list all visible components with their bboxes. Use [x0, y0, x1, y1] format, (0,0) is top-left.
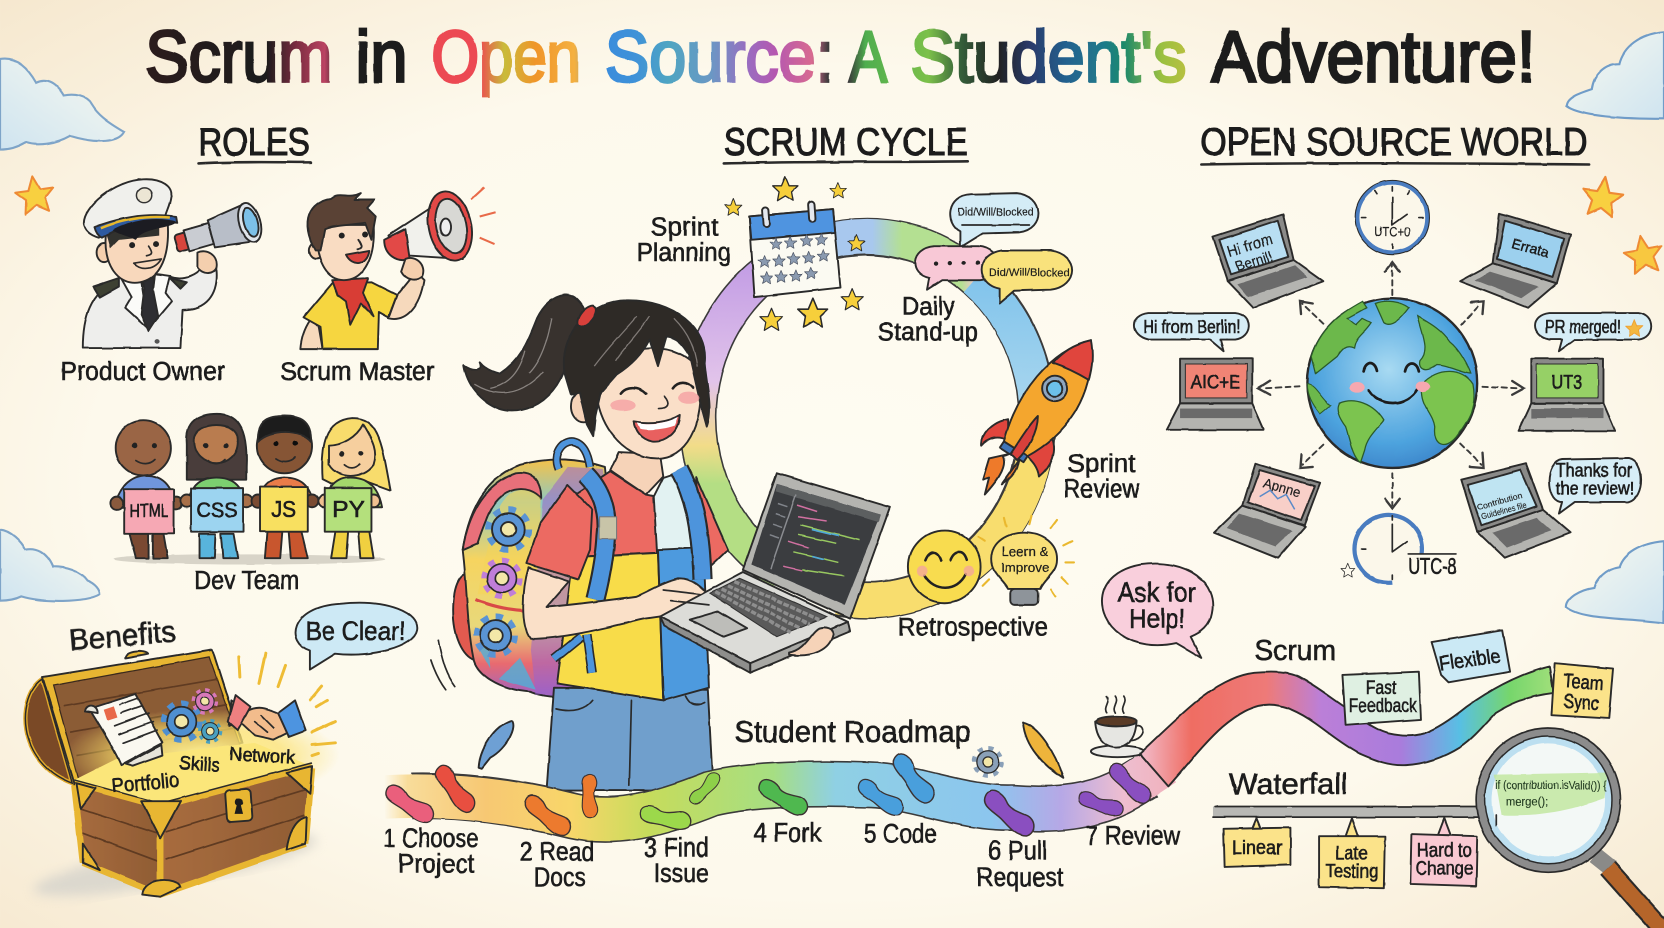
backpack	[453, 441, 626, 697]
panel: student roadmap	[380, 696, 1181, 892]
globe with smiling face	[1307, 298, 1477, 468]
icon: smiley	[908, 531, 981, 603]
note: team sync: Sync	[1563, 691, 1600, 715]
speech bubble: thanks for the review: Thanks for	[1556, 460, 1632, 480]
label: step 2: Docs	[534, 862, 586, 892]
laptop: right	[1519, 359, 1615, 431]
heading: student roadmap: Student Roadmap	[734, 714, 971, 749]
treasure chest	[25, 649, 340, 909]
heading: roles: ROLES	[198, 120, 310, 164]
note: fast feedback: Fast	[1366, 677, 1397, 699]
decorative stars around calendar	[725, 177, 865, 330]
icon: gear	[975, 749, 1001, 775]
label: sprint planning: Sprint	[651, 214, 718, 242]
cycle ring: top arc	[821, 236, 977, 280]
label: product owner: Product Owner	[61, 358, 226, 386]
star: top left	[13, 174, 56, 215]
speech bubble: ask for help: Help!	[1129, 603, 1185, 634]
kid: html	[110, 420, 183, 558]
cloud: top right	[1566, 32, 1664, 119]
label: scrum: Scrum	[1254, 635, 1336, 667]
icon: light bulb learn and improve: Improve	[1001, 560, 1050, 575]
label: scrum master: Scrum Master	[280, 358, 435, 386]
label: step 6: 6 Pull	[988, 836, 1047, 866]
clock: utc+0: UTC+0	[1374, 225, 1411, 240]
label: sprint review: Sprint	[1068, 450, 1135, 478]
shorts	[547, 688, 713, 791]
speech bubble: be clear	[296, 603, 417, 670]
label: step 7: 7 Review	[1086, 821, 1181, 851]
speech bubble: ask for help	[1102, 564, 1213, 658]
title: Open	[432, 18, 581, 98]
star: top right	[1580, 175, 1625, 218]
panel: scrum cycle ring	[637, 177, 1140, 642]
label: step 3: 3 Find	[644, 832, 709, 862]
note: flexible: Flexible	[1438, 645, 1502, 676]
label: benefits: Benefits	[68, 614, 177, 658]
cycle ring: right arc	[975, 279, 1037, 465]
cloud: bottom right	[1566, 541, 1664, 623]
clock: utc-8: UTC-8	[1408, 553, 1457, 579]
label: network: Network	[229, 744, 296, 769]
laptop	[660, 473, 890, 673]
title: Adventure!	[1211, 18, 1536, 98]
cloud: middle left	[0, 530, 100, 601]
speech bubble: be clear: Be Clear!	[306, 616, 405, 646]
magnifying glass	[1476, 728, 1664, 928]
label: step 2: 2 Read	[520, 837, 594, 867]
kid: html: HTML	[130, 501, 169, 521]
note: hard to change: Change	[1416, 857, 1473, 879]
label: step 1	[383, 823, 479, 878]
note: fast feedback	[1342, 672, 1421, 725]
icon: rocket	[982, 341, 1092, 495]
waterfall line	[1213, 806, 1478, 817]
icon: coffee cup	[1091, 696, 1144, 757]
title	[145, 18, 1536, 98]
icon: skills gears	[164, 691, 220, 741]
speech bubble: ask for help: Ask for	[1117, 577, 1196, 608]
label: skills: Skills	[179, 753, 220, 777]
roadmap path	[384, 764, 1164, 820]
title: Student's	[911, 18, 1186, 98]
speech bubbles: daily stand-up	[915, 193, 1072, 303]
speech bubble: pr merged: PR merged!	[1545, 317, 1622, 337]
note: team sync: Team	[1563, 670, 1604, 695]
label: step 2	[520, 837, 594, 892]
cycle ring: left arc	[698, 243, 824, 573]
laptop: bottom right: Contribution	[1476, 490, 1524, 512]
laptop: top left: Hi from	[1225, 231, 1275, 261]
laptop: bottom left	[1214, 464, 1320, 558]
icon: light bulb learn and improve	[978, 516, 1074, 605]
laptop: right: UT3	[1551, 372, 1582, 393]
icon: handshake	[228, 695, 306, 740]
title: in	[356, 18, 408, 98]
laptop: top left	[1213, 214, 1323, 308]
panel: benefits	[25, 603, 417, 909]
group: dev team characters	[110, 414, 391, 565]
footprints	[380, 750, 1157, 840]
note: late testing: Testing	[1325, 861, 1379, 883]
cycle ring: bottom arc	[838, 463, 1033, 600]
speech bubble: pr merged	[1535, 313, 1651, 351]
magnifying glass: merge();	[1506, 794, 1548, 808]
speech bubble: thanks for the review	[1549, 458, 1641, 514]
kid: css: CSS	[196, 499, 238, 522]
label: waterfall: Waterfall	[1229, 768, 1348, 801]
shirt	[526, 471, 728, 700]
laptop: bottom right	[1461, 464, 1571, 558]
kid: py	[318, 418, 391, 558]
title: Source:	[605, 18, 834, 98]
label: step 4: 4 Fork	[753, 818, 822, 848]
label: dev team: Dev Team	[194, 567, 299, 595]
icon: light bulb learn and improve: Leern &	[1002, 544, 1049, 559]
supporting hand	[790, 627, 833, 655]
dashed arrows around globe	[1259, 262, 1524, 508]
arm and hand	[523, 568, 713, 639]
kid: js	[252, 416, 318, 558]
laptop: left: AIC+E	[1191, 372, 1241, 393]
note: fast feedback: Feedback	[1349, 695, 1417, 717]
kid: css	[180, 414, 253, 558]
note: team sync	[1551, 663, 1613, 718]
label: step 1: 1 Choose	[383, 823, 479, 853]
note: hard to change: Hard to	[1417, 839, 1472, 861]
laptop: bottom right: Guidelines file	[1480, 500, 1528, 521]
label: portfolio: Portfolio	[111, 770, 180, 797]
label: step 5: 5 Code	[864, 819, 937, 849]
backpack straps	[554, 469, 703, 673]
note: hard to change	[1410, 818, 1477, 886]
heading: scrum cycle: SCRUM CYCLE	[724, 120, 968, 164]
speech bubble: hi from berlin	[1134, 313, 1249, 351]
note: late testing	[1319, 818, 1385, 888]
clock: utc-8	[1340, 515, 1457, 583]
label: step 6: Request	[976, 862, 1064, 892]
label: sprint planning	[637, 214, 731, 267]
title: A	[849, 18, 887, 98]
label: step 1: Project	[398, 848, 475, 878]
label: sprint review: Review	[1063, 476, 1140, 504]
note: flexible	[1432, 630, 1510, 682]
title: Scrum	[145, 18, 332, 98]
speech bubbles: daily stand-up: Did/Will/Blocked	[989, 267, 1070, 279]
label: sprint review	[1063, 450, 1140, 504]
panel: open source world	[1134, 180, 1651, 583]
label: sprint planning: Planning	[637, 239, 731, 267]
note: late testing: Late	[1335, 843, 1368, 865]
panel: roles	[61, 179, 496, 595]
character: scrum master	[300, 187, 496, 349]
laptop: left	[1166, 359, 1264, 430]
label: daily stand-up: Stand-up	[878, 319, 978, 347]
speech bubble: hi from berlin: Hi from Berlin!	[1143, 317, 1241, 337]
star: right	[1621, 233, 1664, 275]
hand resting on keyboard	[663, 590, 709, 605]
label: step 3	[644, 832, 709, 888]
clock: utc+0	[1355, 180, 1429, 255]
speech bubbles: daily stand-up: Did/Will/Blocked	[957, 206, 1034, 218]
motion lines	[431, 640, 455, 690]
label: step 6	[976, 836, 1064, 892]
label: step 3: Issue	[654, 858, 709, 888]
kid: py: PY	[332, 496, 366, 522]
heading: open source world: OPEN SOURCE WORLD	[1200, 120, 1588, 164]
shine rays	[239, 654, 335, 756]
kid: js: JS	[272, 496, 296, 522]
laptop: top left: Bernil!	[1234, 249, 1275, 276]
icon: gold feather	[1023, 723, 1063, 778]
icon: portfolio scroll	[85, 694, 162, 766]
label: daily stand-up: Daily	[902, 293, 955, 321]
character: product owner	[83, 179, 265, 348]
head and hair	[464, 295, 710, 495]
cloud: top left	[0, 59, 124, 150]
laptop: bottom left: Apnne	[1262, 475, 1303, 500]
note: linear: Linear	[1232, 837, 1282, 859]
note: linear	[1224, 818, 1290, 867]
icon: calendar with stars	[749, 201, 840, 297]
label: retrospective: Retrospective	[898, 614, 1048, 642]
panel: scrum vs waterfall	[1140, 630, 1664, 928]
laptop: top right: Errata	[1510, 236, 1551, 261]
speech bubble: thanks for the review: the review!	[1556, 479, 1634, 499]
laptop: top right	[1460, 213, 1571, 308]
character: student with backpack and laptop	[431, 295, 890, 791]
label: daily stand-up	[878, 293, 978, 347]
icon: blue feather	[479, 721, 513, 768]
ribbon: scrum path	[1140, 666, 1554, 786]
magnifying glass: if (contribution.isValid()) {	[1495, 779, 1607, 793]
